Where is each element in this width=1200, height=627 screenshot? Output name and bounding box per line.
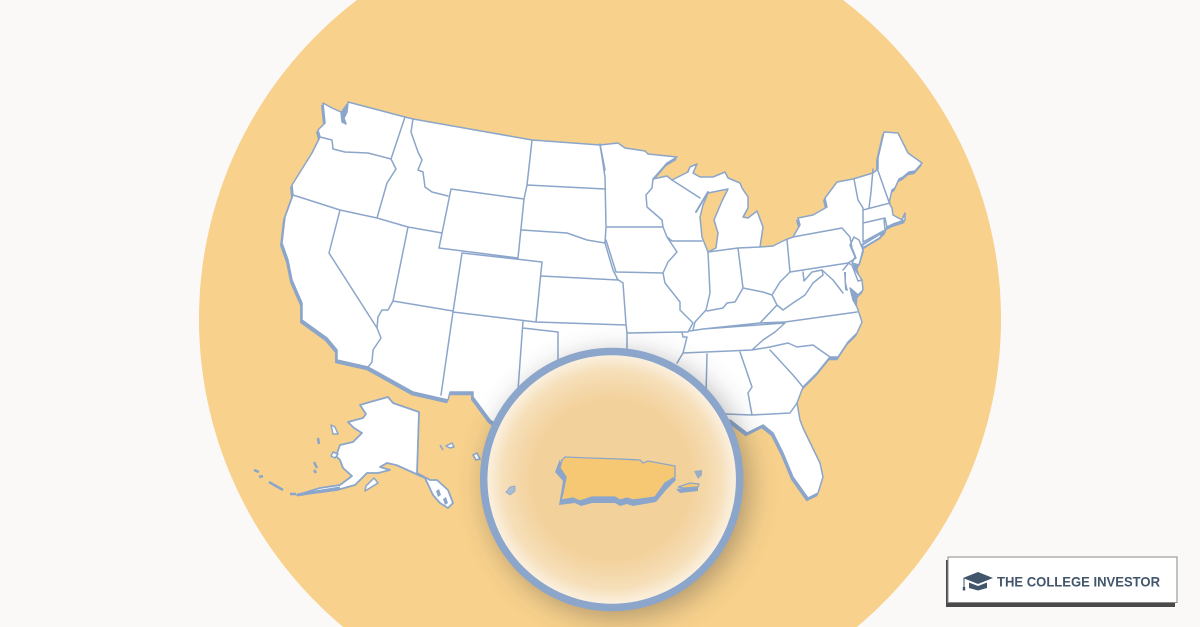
puerto rico shadow	[555, 459, 676, 506]
lake michigan	[700, 189, 728, 252]
map: contiguous United States	[281, 102, 922, 500]
hawaii island	[473, 453, 480, 460]
large orange circle	[199, 0, 1001, 627]
logo text: THE COLLEGE INVESTOR	[997, 574, 1160, 590]
culebra island	[694, 470, 702, 479]
puerto rico	[560, 457, 675, 501]
green bay	[696, 192, 708, 212]
aleutian and alaskan islands	[254, 425, 454, 495]
chesapeake bay	[844, 272, 848, 291]
long island	[862, 232, 883, 248]
logo badge	[946, 557, 1177, 607]
icon: graduation cap	[963, 572, 993, 590]
southeast alaska island specks	[436, 489, 448, 505]
mona island	[506, 486, 515, 495]
magnifier shadow	[488, 356, 748, 616]
magnifier lens with Puerto Rico	[484, 352, 740, 608]
state borders	[293, 117, 890, 415]
map: alaska	[254, 397, 454, 508]
vieques island	[676, 486, 698, 493]
